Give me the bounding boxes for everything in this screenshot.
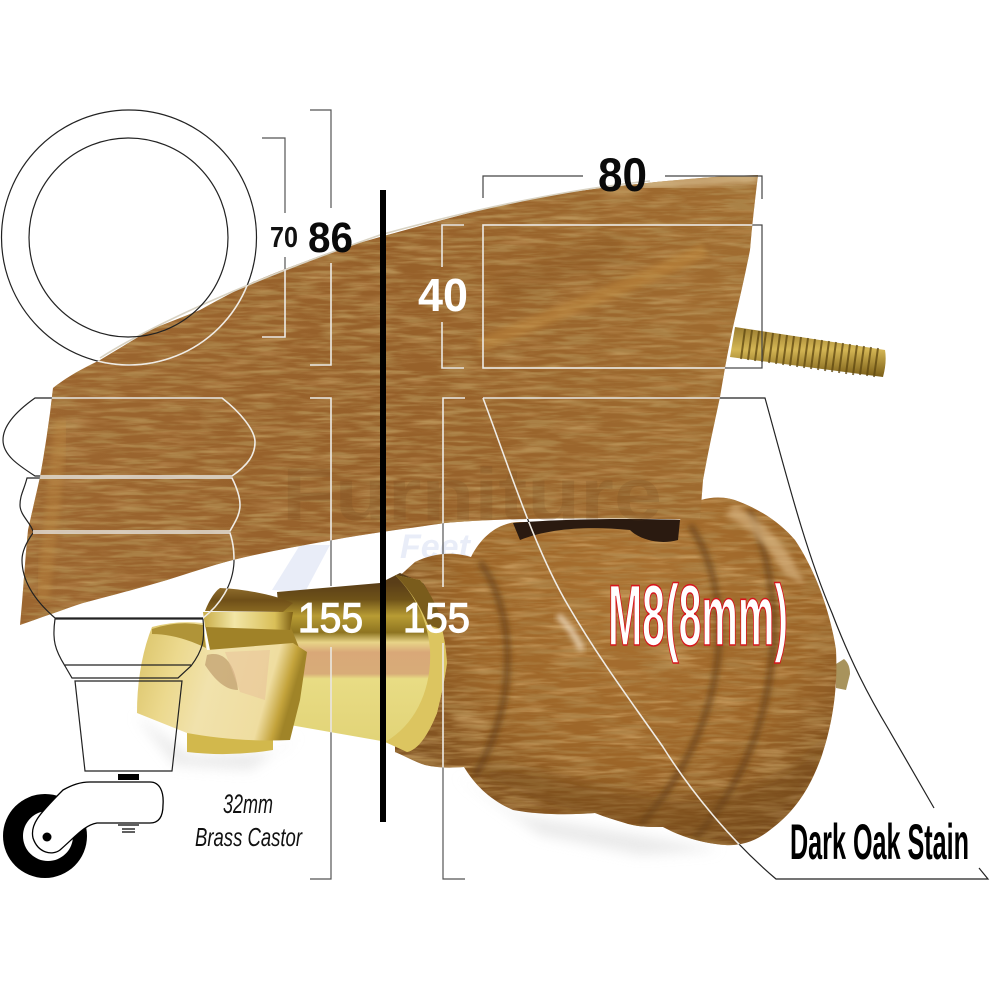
label: 155 right: 155 (403, 594, 470, 641)
floor shadows (135, 715, 720, 855)
castor reflection (205, 654, 238, 690)
castor pink tint (225, 650, 270, 700)
housing inner rim (152, 623, 206, 648)
label: castor size: 32mm (223, 789, 273, 819)
brass tube (277, 573, 447, 752)
bracket 155 right (443, 398, 465, 879)
oak wedge leg (20, 175, 758, 625)
dimension outlines (light on wood) (33, 224, 752, 844)
castor wheel icon (3, 774, 163, 878)
wheel stem (187, 730, 273, 754)
mount plate (118, 774, 139, 780)
label: 80: 80 (598, 148, 647, 201)
text: M8(8mm) (608, 568, 788, 664)
wedge top edge highlight (100, 181, 650, 358)
ring: top view (2, 110, 256, 365)
highlight on bulge (558, 615, 582, 650)
angled profile (483, 398, 988, 879)
leg profile (3, 398, 255, 476)
watermark: Furniture: Furniture (282, 453, 662, 536)
bracket 70 (262, 138, 285, 337)
castor dome (205, 588, 293, 612)
brass castor (137, 573, 447, 754)
rectangle top (483, 225, 762, 368)
label: 70: 70 (270, 222, 298, 254)
dimension outlines (dark on white) (2, 110, 988, 879)
castor housing (137, 622, 307, 741)
bracket 40 (442, 225, 464, 368)
threaded bolt (730, 327, 886, 377)
tube collar shading (395, 575, 444, 630)
tube collar (385, 575, 447, 752)
leg grooves (475, 510, 773, 838)
axle (42, 832, 52, 842)
label: 86: 86 (308, 214, 353, 262)
bracket 86 (310, 110, 331, 365)
label: 40: 40 (418, 269, 468, 321)
small bolt on leg end (836, 659, 850, 690)
bracket 80 (483, 176, 762, 199)
shadow under wedge (513, 519, 680, 542)
castor arm (32, 782, 163, 853)
label: castor type: Brass Castor (195, 822, 303, 852)
neck under cap (205, 625, 300, 650)
watermark: Feet: Feet (400, 528, 472, 566)
grain bands (42, 178, 758, 600)
castor band (203, 612, 293, 630)
highlight on head (725, 505, 805, 585)
turned wooden leg (395, 498, 836, 845)
label: 155 left: 155 (298, 594, 363, 641)
mount bolt (118, 825, 139, 832)
centre divider (380, 190, 386, 822)
bracket 155 left (310, 398, 331, 879)
lower leg shade (482, 740, 826, 845)
watermark: Feet (272, 528, 472, 592)
